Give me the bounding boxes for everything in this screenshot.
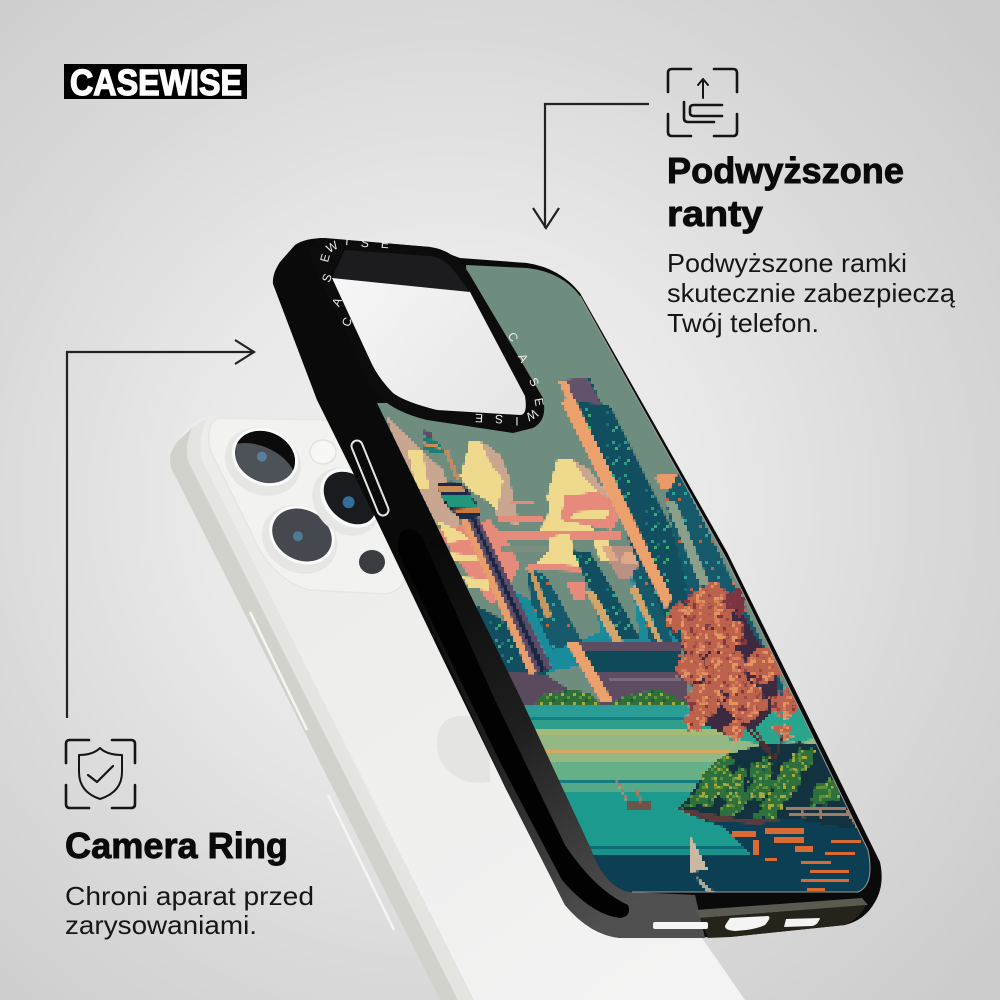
ring text right: S: [526, 375, 542, 389]
dock: [786, 808, 858, 828]
ring text left: W: [324, 238, 341, 256]
ring window: [332, 278, 526, 415]
water: [524, 705, 870, 892]
art: [377, 265, 870, 892]
CN tower: [422, 430, 552, 676]
right skyscraper: [654, 474, 786, 696]
flash: [310, 440, 336, 464]
ring text right: E: [531, 397, 547, 407]
ring text right: [475, 330, 547, 428]
text: raised edges description: [667, 248, 956, 338]
low building: [565, 641, 690, 703]
sky: [377, 265, 791, 850]
case shell: [273, 238, 882, 938]
lower left city: [476, 606, 549, 675]
reflection: [732, 828, 860, 891]
lens: right: [298, 453, 395, 550]
tall skyscraper: [558, 378, 690, 642]
ring text right: W: [523, 406, 540, 424]
art gloss edge: [580, 296, 870, 892]
ring text left: A: [329, 295, 345, 309]
camera ring: [310, 234, 547, 433]
shoreline: [508, 672, 690, 705]
heading: Podwyższone ranty: Podwyższone: [667, 150, 904, 191]
apple logo shadow: [437, 716, 490, 783]
inner lip: [332, 250, 470, 292]
lens: top: [214, 415, 312, 508]
clouds: [387, 417, 655, 603]
text: camera ring description: zarysowaniami.: [65, 910, 257, 940]
phone side band inner: [187, 418, 474, 1000]
rocks: [676, 808, 790, 824]
ring text left: S: [319, 272, 335, 284]
ring text right: S: [495, 412, 503, 426]
logo: CASEWISE: CASEWISE: [70, 62, 242, 103]
heading: Podwyższone ranty: ranty: [667, 193, 763, 234]
ring text right: I: [515, 414, 519, 428]
port: right: [784, 918, 820, 927]
lidar sensor: [359, 550, 385, 574]
ring text right: A: [515, 351, 531, 365]
text: raised edges description: skutecznie zabezpieczą: [667, 278, 956, 308]
bottom edge light: [696, 898, 868, 918]
ring text left: E: [380, 237, 390, 251]
phone side band outer: [170, 428, 458, 1000]
port: middle: [725, 916, 769, 931]
text: raised edges description: Podwyższone ramki: [667, 248, 907, 278]
sailboat: [690, 837, 716, 892]
shore bushes: [535, 690, 690, 705]
lens: bottom: [250, 492, 350, 587]
heading: Camera Ring: Camera Ring: [65, 825, 288, 866]
bushes: [680, 748, 842, 820]
tree: [668, 584, 798, 760]
island: [677, 742, 868, 832]
heading: Podwyższone ranty: [667, 150, 904, 234]
arrow: camera ring callout: [67, 340, 254, 718]
ring text left: C: [339, 315, 355, 329]
ring text left: S: [360, 236, 370, 250]
lower bumper highlight: [400, 535, 705, 938]
icon: raised edges: [668, 69, 737, 136]
icon: shield: [66, 740, 135, 808]
ring text left: [317, 234, 390, 329]
side slot: [398, 529, 629, 918]
camera plateau: [209, 418, 406, 594]
text: camera ring description: Chroni aparat przed: [65, 881, 314, 911]
ring text right: C: [505, 330, 521, 344]
case: [273, 234, 900, 938]
side button: [357, 446, 383, 510]
bottom edge olive: [700, 905, 866, 938]
arrow: raised edges callout: [533, 104, 649, 228]
side buttons: [250, 612, 394, 930]
text: camera ring description: [65, 881, 314, 940]
boat: [617, 780, 652, 810]
text: raised edges description: Twój telefon.: [667, 308, 819, 338]
ring text left: I: [345, 234, 349, 248]
ring text right: E: [475, 411, 483, 425]
port: left: [653, 922, 708, 929]
teal behind tree: [726, 708, 813, 744]
white phone: [170, 415, 745, 1000]
city back layer: [516, 576, 678, 672]
phone body: [170, 416, 745, 1000]
ring text left: E: [317, 252, 333, 264]
ring body: [310, 238, 544, 433]
mid skyscrapers: [528, 550, 672, 650]
